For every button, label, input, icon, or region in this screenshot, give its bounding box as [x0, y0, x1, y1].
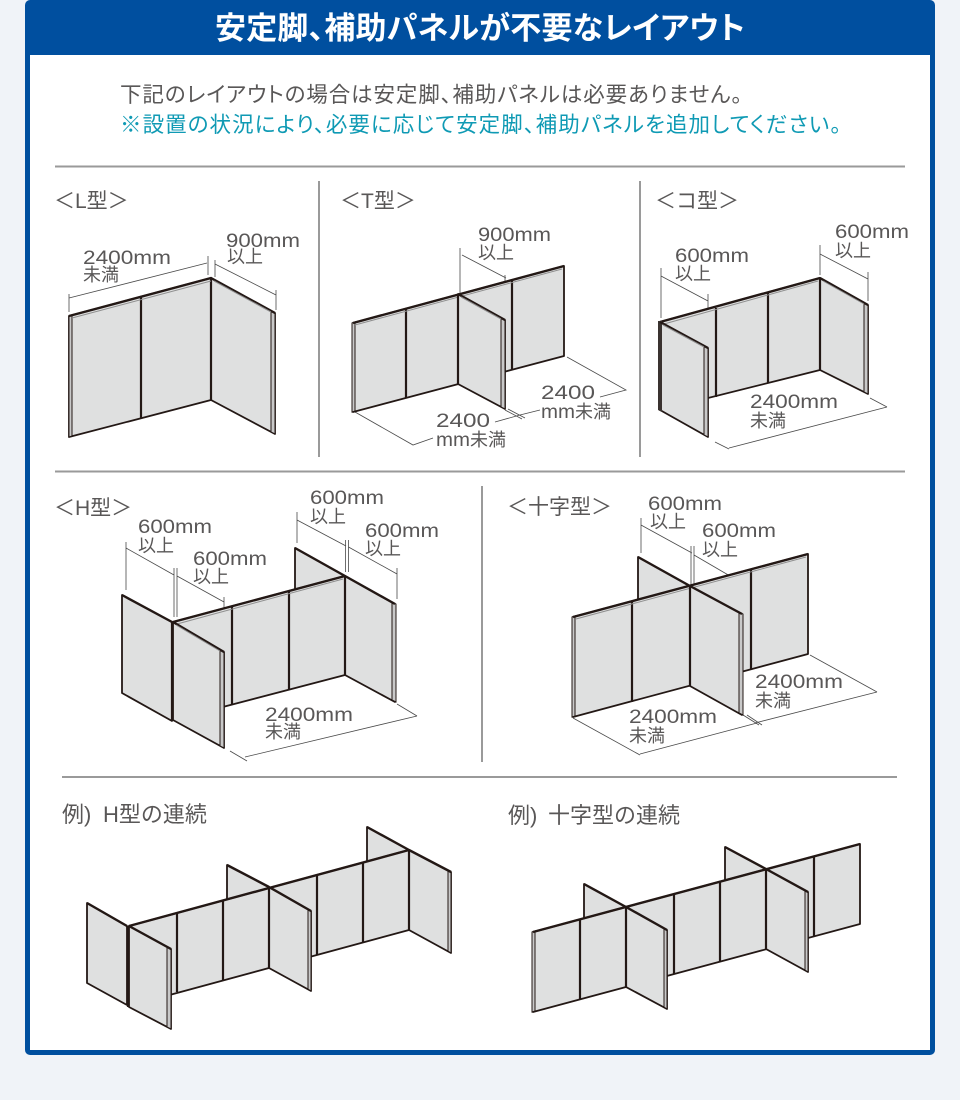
- dimension labels: H: 以上: [193, 567, 229, 587]
- dimension labels: cross: [629, 493, 843, 746]
- dimension labels: L: [83, 230, 300, 285]
- heading: L: ＜L型＞: [54, 190, 129, 213]
- dimension labels: L: 900mm: [226, 230, 300, 252]
- dimension labels: L: 2400mm: [83, 247, 171, 269]
- dimension labels: U: 600mm: [675, 245, 749, 267]
- dimension lines: U: [661, 245, 887, 449]
- dimension labels: U: 未満: [750, 411, 786, 431]
- dimension labels: cross: 2400mm: [755, 671, 843, 693]
- panel: H chain example: [62, 802, 451, 1029]
- dimension labels: T: mm: [541, 401, 575, 423]
- dimension labels: T: [436, 224, 611, 451]
- dimension labels: U: [675, 221, 909, 431]
- heading: cross chain: 十字型の連続: [548, 803, 680, 828]
- heading: H: ＜H型＞: [54, 497, 132, 520]
- partition panels: cross: [572, 554, 808, 717]
- panel: H layout: [54, 487, 439, 761]
- heading: T: ＜T型＞: [340, 190, 416, 213]
- partition panels: H chain: [87, 827, 451, 1029]
- dimension labels: H: 2400mm: [265, 704, 353, 726]
- dimension labels: T: 2400: [436, 410, 490, 432]
- dimension labels: cross: 以上: [702, 540, 738, 560]
- panel: T layout: [340, 190, 626, 451]
- dimension labels: cross: 未満: [629, 726, 665, 746]
- dimension labels: H: 以上: [365, 539, 401, 559]
- title: 安定脚、補助パネルが不要なレイアウト: [215, 11, 745, 46]
- partition panels: L: [69, 278, 275, 437]
- dimension labels: cross: 600mm: [702, 520, 776, 542]
- dimension labels: H: [138, 487, 439, 742]
- dimension labels: H: 以上: [310, 507, 346, 527]
- dimension labels: T: 未満: [575, 402, 611, 422]
- heading: H chain: H型の連続: [103, 802, 207, 827]
- dimension labels: L: 未満: [83, 265, 119, 285]
- dimension labels: T: 2400: [541, 382, 595, 404]
- dimension labels: L: 以上: [227, 247, 263, 267]
- partition panels: U: [658, 278, 868, 437]
- panel: U layout: [655, 190, 909, 449]
- intro text: 下記のレイアウトの場合は安定脚、補助パネルは必要ありません。: [120, 83, 742, 107]
- heading: U: ＜コ型＞: [655, 190, 739, 213]
- dimension labels: H: 600mm: [365, 520, 439, 542]
- panel: cross layout: [507, 493, 877, 755]
- partition panels: T: [352, 266, 564, 412]
- heading: H chain: 例): [62, 802, 91, 827]
- panel: L layout: [54, 190, 300, 437]
- dimension labels: H: 600mm: [310, 487, 384, 509]
- dimension labels: U: 600mm: [835, 221, 909, 243]
- dimension labels: H: 以上: [138, 536, 174, 556]
- heading: cross chain: 例): [508, 803, 537, 828]
- dimension lines: L: [69, 256, 276, 312]
- dimension labels: T: 900mm: [478, 224, 551, 246]
- dimension labels: cross: 以上: [650, 512, 686, 532]
- dimension labels: T: 以上: [478, 243, 514, 263]
- dimension labels: T: 未満: [470, 430, 506, 450]
- dimension labels: U: 2400mm: [750, 391, 838, 413]
- partition panels: H: [122, 548, 396, 748]
- dimension labels: T: mm: [436, 429, 470, 451]
- dimension labels: H: 未満: [265, 722, 301, 742]
- dimension labels: cross: 600mm: [648, 493, 722, 515]
- dimension labels: cross: 未満: [755, 691, 791, 711]
- dimension lines: T: [355, 248, 626, 445]
- dimension labels: U: 以上: [675, 264, 711, 284]
- note text: ※設置の状況により、必要に応じて安定脚、補助パネルを追加してください。: [120, 113, 841, 137]
- dimension lines: H: [126, 512, 417, 761]
- partition panels: cross chain: [532, 844, 860, 1012]
- dimension labels: H: 600mm: [193, 548, 267, 570]
- panel: cross chain example: [508, 803, 860, 1012]
- dimension labels: H: 600mm: [138, 516, 212, 538]
- heading: cross: ＜十字型＞: [507, 496, 612, 519]
- dimension lines: cross: [573, 518, 877, 755]
- dimension labels: U: 以上: [835, 241, 871, 261]
- dimension labels: cross: 2400mm: [629, 706, 717, 728]
